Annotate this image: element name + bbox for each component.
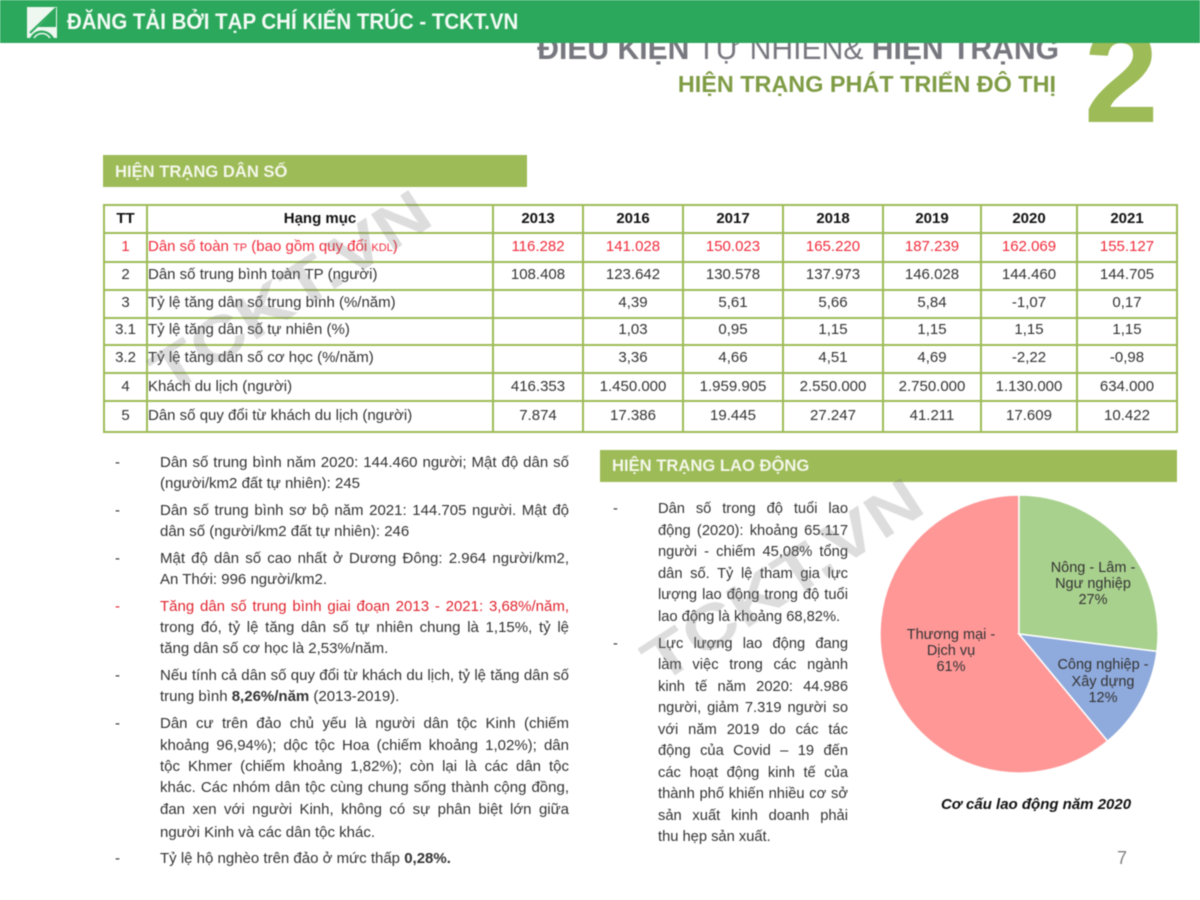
text block: population notes bbox=[115, 454, 570, 867]
population table: Tỷ lệ tăng dân số tự nhiên (%) bbox=[148, 320, 350, 338]
population table: 19.445 bbox=[710, 407, 756, 424]
population table: Dân số toàn TP (bao gồm quy đổi KDL) bbox=[148, 238, 398, 255]
population table bbox=[102, 203, 1179, 434]
population table: 123.642 bbox=[606, 266, 660, 282]
text block: population notes: - bbox=[115, 850, 120, 867]
population table: 1.959.905 bbox=[700, 378, 766, 394]
population table: 2021 bbox=[1110, 210, 1144, 226]
population table: 144.705 bbox=[1100, 266, 1154, 282]
text block: population notes: Dân cư trên đảo chủ yếu là người dân tộc Kinh (chiếm bbox=[160, 715, 569, 732]
slice: services 61%: Dịch vụ bbox=[927, 643, 975, 659]
population table: 2017 bbox=[716, 210, 750, 226]
population table: 4 bbox=[121, 378, 130, 394]
population table: 4,69 bbox=[917, 348, 947, 366]
text block: labour notes: người, giảm 7.319 người so bbox=[658, 700, 848, 716]
population table: 3.1 bbox=[115, 320, 136, 338]
text block: population notes: người Kinh và các dân tộc khác. bbox=[160, 824, 375, 841]
text block: population notes: trong đó, tỷ lệ tăng dân số tự nhiên chung là 1,15%, tỷ lệ bbox=[160, 619, 569, 636]
population table: 1,15 bbox=[818, 320, 848, 338]
text block: population notes: - bbox=[115, 598, 120, 615]
text block: labour notes: dân số. Tỷ lệ tham gia lực bbox=[658, 566, 848, 582]
slice: services 61%: Thương mại - bbox=[907, 627, 995, 643]
text block: population notes: Dân số trung bình sơ bộ năm 2021: 144.705 người. Mật độ bbox=[160, 502, 569, 519]
slice: agriculture 27% bbox=[1019, 495, 1158, 651]
slice: agriculture 27%: Ngư nghiệp bbox=[1055, 576, 1131, 592]
text block: labour notes: - bbox=[613, 501, 618, 517]
text block: labour notes: làm việc trong các ngành bbox=[658, 657, 848, 673]
page number: 7 bbox=[1117, 848, 1127, 868]
slice: industry 12% bbox=[1019, 634, 1157, 741]
population table: 1.130.000 bbox=[996, 378, 1062, 394]
population table: Hạng mục bbox=[284, 210, 356, 226]
text block: labour notes: lao động là khoảng 68,82%. bbox=[658, 609, 840, 625]
population table: 3.2 bbox=[115, 348, 136, 366]
text block: population notes: Nếu tính cả dân số quy đổi từ khách du lịch, tỷ lệ tăng dân số bbox=[160, 667, 569, 684]
text block: population notes: - bbox=[115, 667, 120, 684]
section heading: population: HIỆN TRẠNG DÂN SỐ bbox=[115, 162, 287, 181]
text block: population notes: Tỷ lệ hộ nghèo trên đảo ở mức thấp 0,28%. bbox=[160, 850, 451, 867]
watermark: table: TCKT.VN bbox=[137, 176, 443, 408]
population table: 27.247 bbox=[810, 407, 856, 424]
population table: 4,51 bbox=[818, 348, 848, 366]
population table: 5 bbox=[121, 407, 130, 424]
text block: population notes: Mật độ dân số cao nhất ở Dương Đông: 2.964 người/km2, bbox=[160, 550, 569, 567]
text block: population notes: An Thới: 996 người/km2. bbox=[160, 571, 327, 588]
text block: labour notes: - bbox=[613, 636, 618, 652]
slice: industry 12%: Công nghiệp - bbox=[1057, 657, 1149, 673]
population table: 2013 bbox=[521, 210, 555, 226]
population table: 1,03 bbox=[618, 320, 648, 338]
text block: labour notes: Lực lượng lao động đang bbox=[658, 636, 848, 652]
title: chapter heading: ĐIỀU KIỆN TỰ NHIÊN& HIỆN TRẠNG bbox=[537, 33, 1059, 66]
population table: 2019 bbox=[915, 210, 949, 226]
header bar: publisher banner bbox=[0, 0, 1200, 43]
text block: population notes: - bbox=[115, 715, 120, 732]
population table: 4,66 bbox=[718, 348, 748, 366]
population table: 155.127 bbox=[1100, 238, 1154, 255]
population table: 144.460 bbox=[1002, 266, 1056, 282]
population table: 165.220 bbox=[806, 238, 860, 255]
population table: 2.550.000 bbox=[800, 378, 866, 394]
text block: population notes: trung bình 8,26%/năm (2013-2019). bbox=[160, 688, 399, 705]
banner text: ĐĂNG TẢI BỞI TẠP CHÍ KIẾN TRÚC - TCKT.VN bbox=[67, 9, 518, 34]
text block: population notes: đan xen với người Kinh, không có sự phân biệt lớn giữa bbox=[160, 801, 569, 818]
section heading: population bbox=[103, 155, 527, 187]
population table: 0,17 bbox=[1112, 294, 1142, 310]
pie chart: labour structure 2020 bbox=[880, 495, 1158, 773]
population table: 2020 bbox=[1012, 210, 1046, 226]
text block: labour notes: người - chiếm 45,08% tổng bbox=[658, 544, 848, 560]
population table: 130.578 bbox=[706, 266, 760, 282]
population table: 1,15 bbox=[1014, 320, 1044, 338]
population table: 5,61 bbox=[718, 294, 748, 310]
population table: 10.422 bbox=[1104, 407, 1150, 424]
population table: 41.211 bbox=[910, 407, 954, 424]
text block: population notes: - bbox=[115, 550, 120, 567]
population table: 141.028 bbox=[606, 238, 660, 255]
section heading: labour bbox=[600, 450, 1177, 482]
text block: labour notes: sản xuất kinh doanh phải bbox=[658, 808, 848, 824]
population table: 5,84 bbox=[917, 294, 947, 310]
chart caption: Cơ cấu lao động năm 2020 bbox=[941, 796, 1131, 813]
text block: labour notes: thu hẹp sản xuất. bbox=[658, 829, 771, 845]
population table: -1,07 bbox=[1012, 294, 1046, 310]
population table: 2 bbox=[121, 266, 130, 282]
population table: -2,22 bbox=[1012, 348, 1046, 366]
population table: Tỷ lệ tăng dân số cơ học (%/năm) bbox=[148, 348, 374, 366]
population table: Dân số trung bình toàn TP (người) bbox=[148, 266, 377, 282]
text block: labour notes: động (2020): khoảng 65.117 bbox=[658, 523, 848, 539]
population table: 1,15 bbox=[1112, 320, 1142, 338]
watermark: labour section: TCKT.VN bbox=[629, 464, 935, 696]
text block: labour notes bbox=[613, 500, 849, 845]
text block: population notes: (người/km2 đất tự nhiên): 245 bbox=[160, 475, 360, 492]
text block: population notes: dân số (người/km2 đất tự nhiên): 246 bbox=[160, 523, 409, 540]
population table: TT bbox=[116, 210, 135, 226]
section heading: labour: HIỆN TRẠNG LAO ĐỘNG bbox=[612, 456, 809, 475]
population table: 150.023 bbox=[706, 238, 760, 255]
population table: Khách du lịch (người) bbox=[148, 378, 292, 394]
population table: 2.750.000 bbox=[899, 378, 965, 394]
text block: labour notes: động của Covid – 19 đến bbox=[658, 743, 848, 759]
text block: labour notes: Dân số trong độ tuổi lao bbox=[658, 501, 848, 517]
population table: Tỷ lệ tăng dân số trung bình (%/năm) bbox=[148, 294, 396, 310]
text block: population notes: tộc Khmer (chiếm khoảng 1,82%); còn lại là các dân tộc bbox=[160, 758, 569, 775]
population table: 3,36 bbox=[618, 348, 648, 366]
population table: 116.282 bbox=[511, 238, 565, 255]
population table: 187.239 bbox=[905, 238, 959, 255]
population table: 1 bbox=[121, 238, 130, 255]
text block: population notes: - bbox=[115, 454, 120, 471]
population table: 7.874 bbox=[519, 407, 557, 424]
text block: labour notes: kinh tế năm 2020: 44.986 bbox=[658, 679, 848, 695]
population table: 162.069 bbox=[1002, 238, 1056, 255]
text block: population notes: khác. Các nhóm dân tộc cùng chung sống thành cộng đồng, bbox=[160, 779, 569, 796]
population table: 3 bbox=[121, 294, 130, 310]
population table: 4,39 bbox=[618, 294, 648, 310]
slice: services 61% bbox=[880, 495, 1108, 773]
population table: 2016 bbox=[616, 210, 650, 226]
population table: 1.450.000 bbox=[600, 378, 666, 394]
subtitle: urban development status: HIỆN TRẠNG PHÁT TRIỂN ĐÔ THỊ bbox=[678, 71, 1056, 97]
slice: agriculture 27%: 27% bbox=[1078, 592, 1108, 608]
population table: 17.386 bbox=[610, 407, 656, 424]
population table: 137.973 bbox=[806, 266, 860, 282]
text block: population notes: khoảng 96,94%); dộc tộc Hoa (chiếm khoảng 1,02%); dân bbox=[160, 737, 569, 754]
text block: population notes: Dân số trung bình năm 2020: 144.460 người; Mật độ dân số bbox=[160, 454, 569, 471]
slice: industry 12%: Xây dựng bbox=[1072, 674, 1134, 690]
population table: 0,95 bbox=[718, 320, 748, 338]
slice: agriculture 27%: Nông - Lâm - bbox=[1051, 560, 1135, 576]
population table: 416.353 bbox=[511, 378, 565, 394]
text block: population notes: tăng dân số cơ học là 2,53%/năm. bbox=[160, 640, 388, 657]
text block: labour notes: với năm 2019 do các tác bbox=[658, 722, 848, 738]
population table: 17.609 bbox=[1006, 407, 1052, 424]
population table: 634.000 bbox=[1100, 378, 1154, 394]
chapter number: 2 bbox=[1084, 2, 1159, 151]
text block: labour notes: thành phố khiến nhiều cơ sở bbox=[658, 786, 848, 802]
slice: industry 12%: 12% bbox=[1088, 690, 1118, 706]
slice: services 61%: 61% bbox=[936, 659, 966, 675]
text block: population notes: - bbox=[115, 502, 120, 519]
population table: 108.408 bbox=[511, 266, 565, 282]
population table: 1,15 bbox=[917, 320, 947, 338]
population table: 146.028 bbox=[905, 266, 959, 282]
population table: 2018 bbox=[816, 210, 850, 226]
text block: population notes: Tăng dân số trung bình giai đoạn 2013 - 2021: 3,68%/năm, bbox=[160, 598, 569, 615]
population table: 5,66 bbox=[818, 294, 848, 310]
icon: publisher logo bbox=[26, 6, 58, 39]
population table: -0,98 bbox=[1110, 348, 1144, 366]
text block: labour notes: lượng lao động trong độ tuổi bbox=[658, 587, 848, 603]
population table: Dân số quy đổi từ khách du lịch (người) bbox=[148, 407, 412, 424]
text block: labour notes: các hoạt động kinh tế của bbox=[658, 765, 848, 781]
